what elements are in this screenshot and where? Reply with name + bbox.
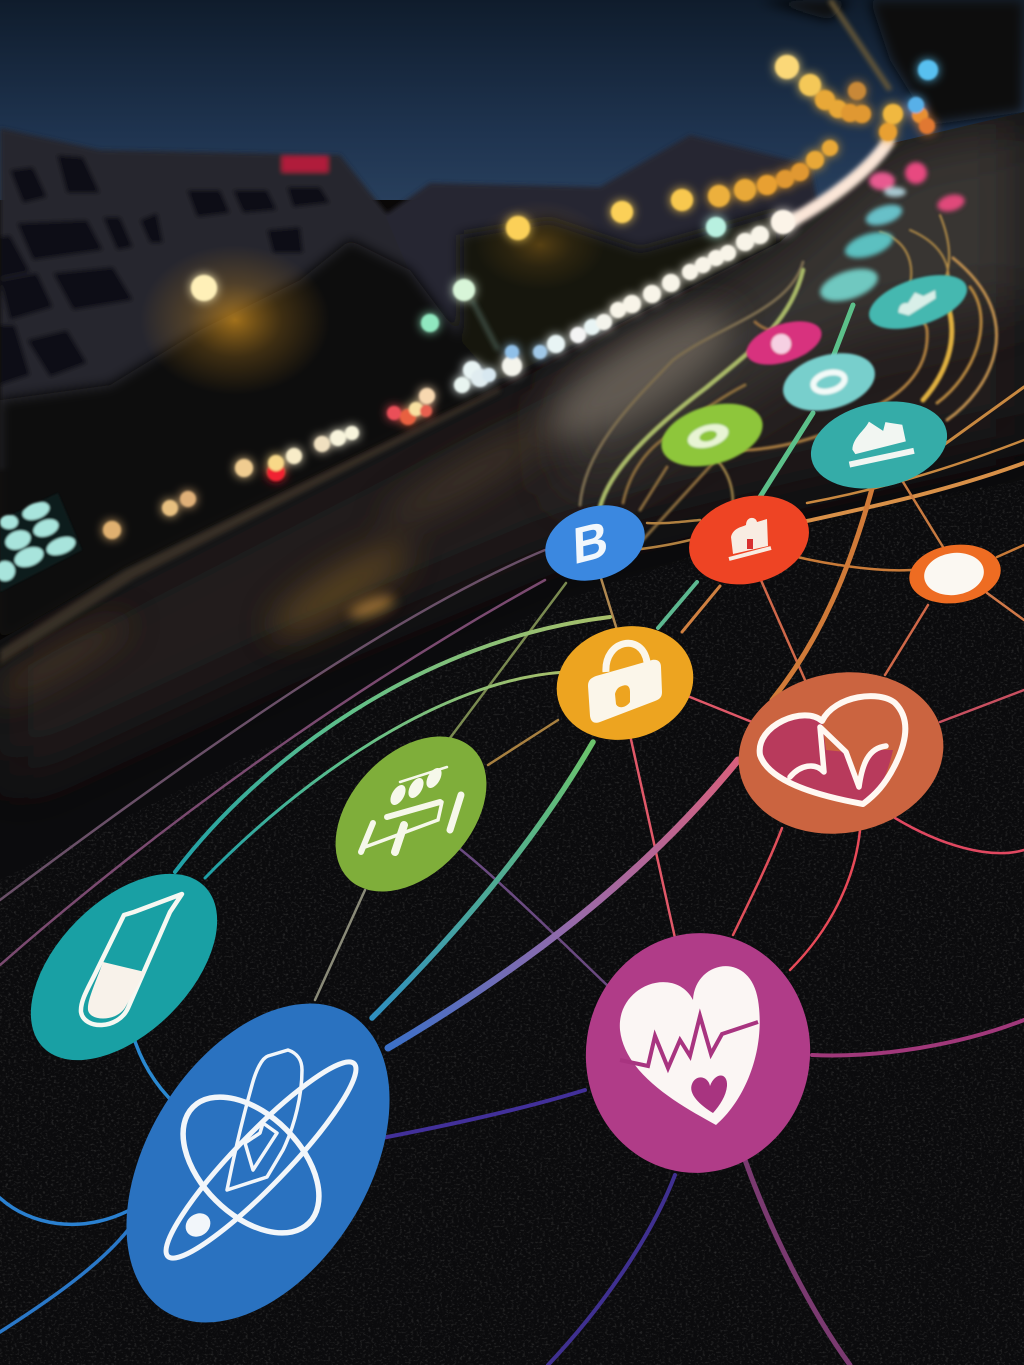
building windows [0,155,330,385]
node: large magenta heart [570,919,826,1187]
green lamp post [472,300,498,350]
reflection highlight [347,591,397,623]
green thick line to B [600,270,803,507]
node: amber lock [545,612,705,754]
second green arc [205,672,565,878]
node: large orange heart [726,656,956,850]
node: green table [306,707,516,921]
node: blue B [535,493,655,593]
multicolor line [388,760,738,1048]
sky [0,0,1024,300]
white light reflection streak [790,142,888,222]
line blue to lock [372,742,593,1018]
letter B: B [572,509,609,575]
lamp pole [830,0,890,90]
blurred buildings [0,128,820,470]
main green arc to the test tube [175,617,610,872]
short lime to red [658,582,697,628]
node: red house [679,483,819,597]
teal line up [760,305,853,497]
node: teal test tube [0,840,251,1094]
lit asphalt road [0,115,1024,790]
dark trees and street front [0,0,1024,470]
node: pale teal ring [777,344,881,420]
road reflections [0,291,747,709]
sidewalk strip [0,387,500,664]
node: pink [741,313,827,373]
node: orange dot [905,539,1005,609]
node: lime [654,393,770,477]
billboard at left [0,493,82,592]
far blurred gold curves [580,215,997,543]
node: small teal top right [862,264,974,340]
amber tree glows [140,200,605,395]
upper scene: sky and buildings [0,0,1024,660]
lower lines [132,1032,176,1105]
bokeh lights [103,55,938,539]
lower street darkness [0,200,818,326]
distant small nodes [816,192,967,308]
node: large blue atom [72,956,444,1365]
leather texture of the ground [0,480,1024,1365]
orange and red thin lines [0,387,1024,1000]
orange line to heart [772,485,873,700]
node: teal shoes [803,390,955,500]
distant pink lights [869,162,927,197]
